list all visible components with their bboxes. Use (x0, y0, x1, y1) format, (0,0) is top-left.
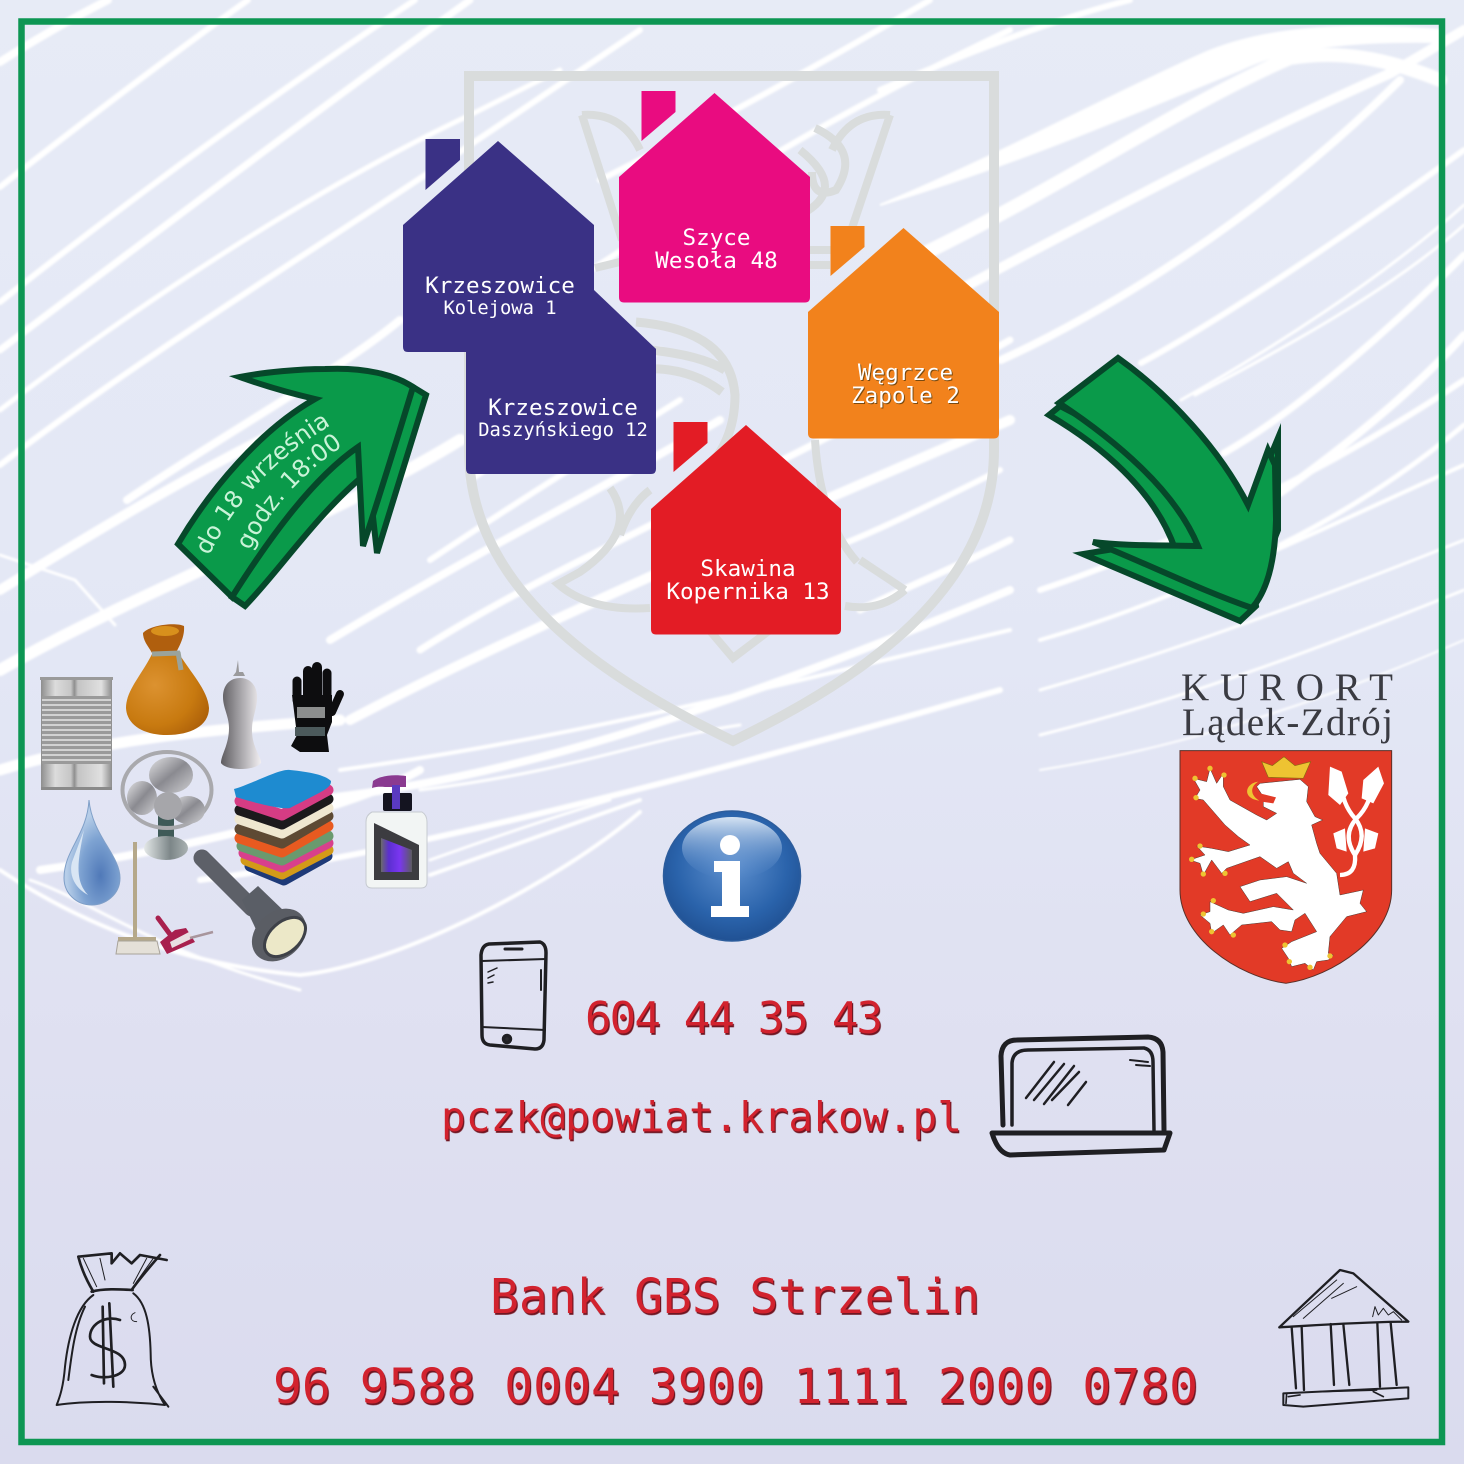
address: Węgrzce (851, 360, 960, 409)
phone number: 604 44 35 43 (585, 993, 883, 1044)
house: Krzeszowice Kolejowa 1 (403, 139, 656, 352)
icon: water drop (64, 800, 120, 905)
address: Szyce: Szyce (682, 225, 751, 251)
bank account number: 96 9588 0004 3900 1111 2000 0780 (273, 1359, 1198, 1415)
icon: desk fan (122, 752, 212, 860)
icon: mop (116, 842, 160, 954)
address: Szyce: Wesoła 48 (655, 248, 778, 274)
arrow: right green arrow (1049, 358, 1278, 621)
address: Krzeszowice Daszyńskiego: Krzeszowice (488, 395, 638, 421)
icon: sketched bank building (1279, 1270, 1408, 1407)
address: Krzeszowice Kolejowa: Krzeszowice (425, 273, 575, 299)
icon: orange sack (126, 624, 209, 735)
logo text (1181, 666, 1393, 744)
deadline text: do 18 września (198, 416, 330, 553)
address: Krzeszowice Kolejowa: Kolejowa 1 (443, 298, 557, 319)
arrow: left green arrow with deadline (174, 366, 430, 610)
coat of arms: white lion on red shield (1180, 751, 1392, 983)
address: Węgrzce: Węgrzce (858, 360, 953, 386)
background streaks (0, 0, 1464, 990)
address: Szyce (655, 225, 778, 274)
address: Skawina: Skawina (700, 556, 796, 582)
logo: Kurort Lądek-Zdrój (1180, 666, 1393, 983)
icon: sketched money bag (57, 1253, 168, 1407)
address: Skawina (666, 556, 830, 605)
icon: pump bottle (366, 775, 427, 888)
house: Szyce Wesoła 48 (619, 91, 810, 302)
address: Węgrzce: Zapole 2 (851, 383, 960, 409)
icon: black glove (291, 667, 340, 752)
icon: sketched laptop (992, 1037, 1170, 1155)
house: Węgrzce Zapole 2 (808, 226, 999, 438)
house: Skawina Kopernika 13 (651, 422, 841, 634)
icon: dustpan and brush (158, 918, 213, 954)
icon: detergent bottle (221, 660, 261, 769)
address: Krzeszowice Daszyńskiego: Daszyńskiego 12 (478, 420, 648, 441)
email address: pczk@powiat.krakow.pl (441, 1093, 962, 1141)
logo text: Lądek-Zdrój (1182, 701, 1393, 744)
icon: tin can (40, 677, 113, 790)
icon: information (664, 811, 800, 941)
address: Krzeszowice Daszyńskiego (478, 395, 648, 441)
icon: flashlight (202, 858, 317, 972)
logo text: KURORT (1181, 666, 1393, 709)
bank name: Bank GBS Strzelin (490, 1269, 980, 1325)
address: Krzeszowice Kolejowa (425, 273, 575, 319)
address: Skawina: Kopernika 13 (666, 579, 830, 605)
faint coat of arms outline behind houses (469, 76, 994, 741)
icon: sketched smartphone (481, 942, 546, 1049)
deadline text: godz. 18:00 (240, 434, 340, 550)
house: Krzeszowice Daszyńskiego 12 (466, 264, 656, 474)
icon: stack of towels (234, 770, 331, 880)
